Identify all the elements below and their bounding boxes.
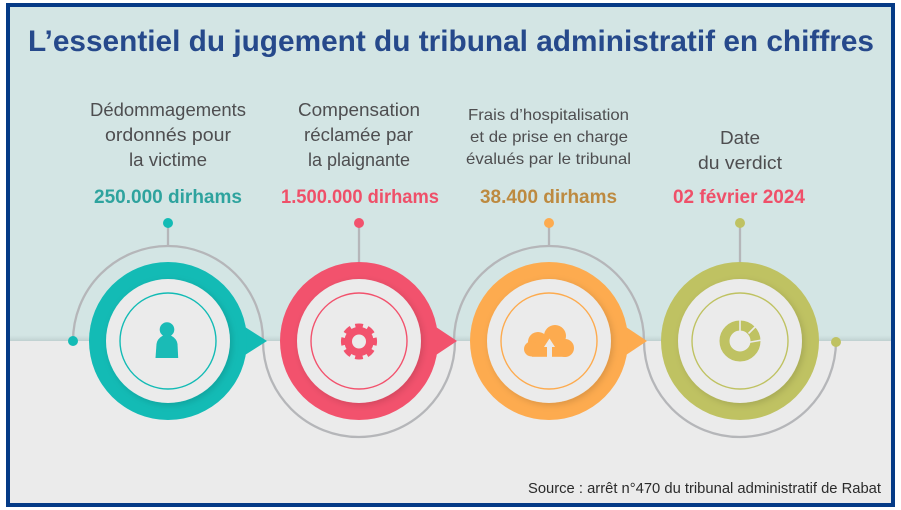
- background: lower grey panel: [6, 341, 895, 507]
- column 1 text: 250.000 dirhams: [94, 187, 242, 208]
- column 1 text: Dédommagements: [90, 100, 246, 120]
- column 4 text: 02 février 2024: [673, 187, 805, 208]
- icon: gear: [343, 326, 375, 357]
- source note: Source : arrêt n°470 du tribunal administratif de Rabat: [528, 481, 881, 497]
- column 4 text: [673, 128, 805, 208]
- title: L’essentiel du jugement du tribunal administratif en chiffres: [28, 25, 874, 58]
- column 3 text: 38.400 dirhams: [480, 187, 617, 208]
- column 4 text: du verdict: [698, 153, 782, 173]
- column 2 text: réclamée par: [304, 125, 413, 145]
- column 2 text: [281, 100, 439, 208]
- column 3 text: [466, 107, 631, 208]
- column 4 text: Date: [720, 128, 760, 148]
- background: upper teal panel: [6, 3, 895, 341]
- column 1 text: [90, 100, 246, 208]
- column 1 text: ordonnés pour: [105, 125, 231, 145]
- step 1: teal circle: [68, 218, 267, 420]
- step 4: olive circle: [661, 218, 841, 420]
- column 3 text: et de prise en charge: [470, 129, 628, 146]
- column 3 text: Frais d’hospitalisation: [468, 107, 629, 124]
- icon: cloud upload: [524, 325, 574, 357]
- column 1 text: la victime: [129, 150, 207, 170]
- column 2 text: Compensation: [298, 100, 420, 120]
- step 2: red circle: [280, 218, 457, 420]
- connector arcs: [73, 223, 836, 437]
- step 3: orange circle: [470, 218, 647, 420]
- icon: person: [156, 322, 178, 358]
- icon: donut chart: [724, 319, 762, 356]
- column 3 text: évalués par le tribunal: [466, 151, 631, 168]
- column 2 text: la plaignante: [308, 150, 410, 170]
- column 2 text: 1.500.000 dirhams: [281, 187, 439, 208]
